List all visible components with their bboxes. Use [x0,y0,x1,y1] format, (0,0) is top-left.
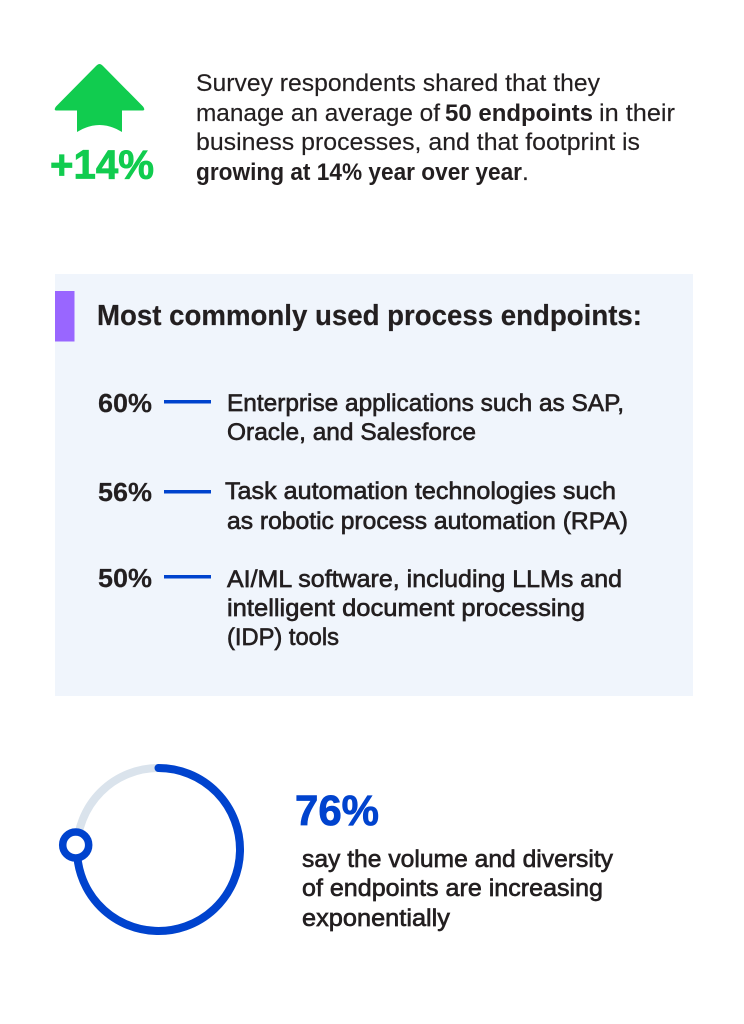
growth figure: +14% [50,142,154,188]
item: task automation [98,477,628,535]
statistic: 76%: 76% [295,787,379,835]
intro text block: . [522,159,529,186]
ring value arc [77,768,240,931]
item: task automation: Task automation technologies such [225,478,616,505]
icon: green up arrow with growth figure [50,64,154,188]
statistic description: say the volume and diversity [302,846,614,873]
item: task automation: as robotic process automation (RPA) [227,508,628,535]
item: AI/ML software: 50% [98,563,152,593]
item: enterprise applications [98,388,624,446]
purple accent bar [55,291,74,342]
statistic description: of endpoints are increasing [302,875,603,902]
intro text block: manage an average of [196,100,440,127]
statistic description [302,846,614,932]
panel heading: Most commonly used process endpoints: [97,300,642,332]
item: enterprise applications: Oracle, and Salesforce [227,419,476,446]
intro text block: business processes, and that footprint is [196,129,640,156]
intro text block: growing at 14% year over year [196,159,522,186]
ring track [77,768,240,931]
ring end marker [63,832,89,858]
panel: most commonly used process endpoints [55,274,693,696]
donut chart: 76% [63,768,240,931]
statistic description: exponentially [302,905,451,932]
icon: up arrow [55,64,144,132]
intro text block: in their [599,100,675,127]
item: AI/ML software [98,563,622,651]
intro text block [196,70,675,186]
item: AI/ML software: AI/ML software, including LLMs and [227,566,622,593]
item: AI/ML software: intelligent document processing [227,595,585,622]
item: AI/ML software: (IDP) tools [227,624,339,651]
panel background [55,274,693,696]
intro text block: Survey respondents shared that they [196,70,601,97]
item: enterprise applications: 60% [98,388,152,418]
item: task automation: 56% [98,477,152,507]
item: enterprise applications: Enterprise applications such as SAP, [227,390,624,417]
intro text block: 50 endpoints [445,100,593,127]
